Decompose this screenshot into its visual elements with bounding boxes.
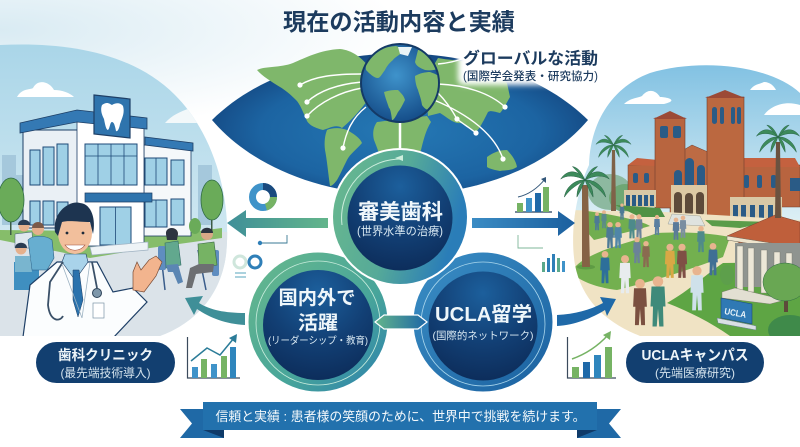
clouds bbox=[624, 91, 671, 104]
label pill: dental clinic: 歯科クリニック bbox=[58, 347, 153, 363]
circle: domestic and international: 活躍 bbox=[298, 312, 338, 334]
connector: top-left band bbox=[341, 252, 367, 282]
UCLA sign bbox=[717, 298, 756, 330]
circle: UCLA study abroad: UCLA留学 bbox=[435, 303, 532, 326]
icon: top right bar chart bbox=[515, 177, 552, 212]
arrow: center to campus bbox=[472, 211, 575, 236]
icon: bracket dot bbox=[258, 241, 262, 245]
global activity label bbox=[458, 47, 603, 85]
banner ribbon bbox=[180, 402, 621, 438]
panel: UCLA campus scene bbox=[570, 60, 800, 345]
circle: aesthetic dentistry bbox=[331, 148, 469, 286]
global activity label: グローバルな活動 bbox=[463, 48, 598, 68]
arrow: lower left curved bbox=[185, 296, 245, 325]
map continents bbox=[257, 49, 517, 190]
panel: world map with globe bbox=[212, 43, 588, 195]
label pill: UCLA campus: (先端医療研究) bbox=[655, 366, 735, 380]
label pill: UCLA campus bbox=[626, 342, 764, 383]
arrow: lower right curved bbox=[557, 297, 616, 326]
connector: top-right band bbox=[433, 252, 460, 281]
students bbox=[594, 204, 718, 326]
clouds bbox=[17, 82, 74, 97]
circle: UCLA study abroad: (国際的ネットワーク) bbox=[432, 329, 534, 342]
icon: lower left bar chart bbox=[188, 334, 240, 378]
palm tree: foreground bbox=[561, 166, 609, 270]
icon: donut chart bbox=[252, 186, 274, 208]
title: 現在の活動内容と実績 bbox=[283, 9, 515, 35]
icon: right bracket line bbox=[518, 235, 543, 248]
icon: left bracket line bbox=[260, 235, 287, 243]
label pill: dental clinic: (最先端技術導入) bbox=[60, 365, 150, 380]
ground bbox=[0, 232, 230, 340]
label pill: UCLA campus: UCLAキャンパス bbox=[642, 347, 748, 364]
banner ribbon: 信頼と実績 : 患者様の笑顔のために、世界中で挑戦を続けます。 bbox=[216, 409, 586, 424]
distant trees bbox=[588, 174, 632, 210]
icon: tooth sign bbox=[94, 95, 130, 138]
trees and shrub bbox=[763, 263, 800, 345]
circle: domestic and international bbox=[248, 252, 388, 392]
connection lines and dots bbox=[297, 57, 508, 162]
doctor bbox=[23, 203, 162, 338]
trees bbox=[0, 178, 223, 235]
panel: three linked circles bbox=[248, 148, 553, 392]
icon: lower right bar chart bbox=[568, 331, 616, 378]
circle: domestic and international: (リーダーシップ・教育) bbox=[268, 334, 368, 347]
circle: domestic and international: 国内外で bbox=[278, 287, 356, 309]
UCLA sign: UCLA bbox=[724, 306, 747, 320]
small greek building bbox=[720, 215, 800, 304]
waiting patients left bbox=[14, 220, 54, 290]
palm trees bbox=[596, 125, 800, 218]
panel: dental clinic scene bbox=[0, 40, 240, 340]
lawn and paths bbox=[570, 205, 800, 340]
icon: small rings bbox=[234, 256, 261, 277]
clinic building bbox=[20, 110, 193, 255]
icon: small bars bbox=[542, 254, 565, 272]
connector: hexagon link bbox=[375, 315, 427, 329]
circle: UCLA study abroad bbox=[413, 252, 553, 392]
global activity label: (国際学会発表・研究協力) bbox=[463, 69, 598, 83]
circle: aesthetic dentistry: 審美歯科 bbox=[358, 201, 443, 224]
arrow: center to clinic bbox=[227, 210, 328, 237]
main hall with towers bbox=[624, 90, 800, 220]
icon: globe bbox=[360, 43, 442, 123]
city silhouette bbox=[2, 155, 212, 225]
circle: aesthetic dentistry: (世界水準の治療) bbox=[357, 224, 443, 238]
waiting patients right bbox=[158, 228, 219, 290]
label pill: dental clinic bbox=[36, 342, 175, 383]
